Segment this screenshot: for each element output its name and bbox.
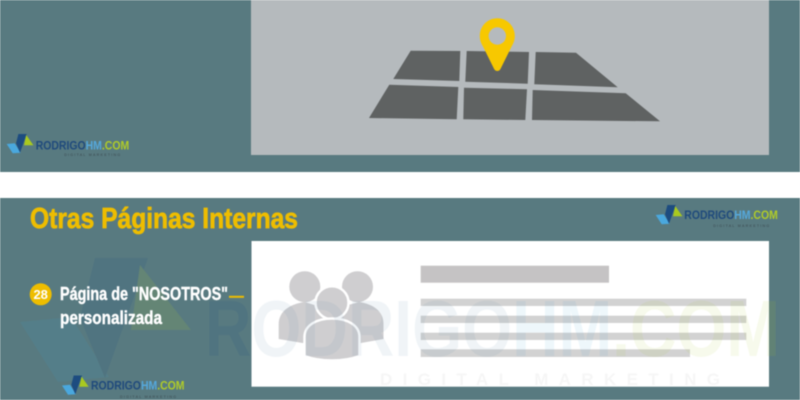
logo: top right: RODRIGOHM.COM [684,208,778,222]
background: top teal band [0,0,800,172]
logo: top right [656,205,778,228]
background: bottom teal band [0,198,800,400]
logo: top right: DIGITAL MARKETING [713,224,769,228]
icon: location pin [480,18,515,71]
logo: bottom left of top section [7,134,129,157]
title: Otras Páginas Internas [30,203,298,235]
map: city blocks [369,51,660,121]
panel: about page placeholder [252,241,769,387]
connector dash [229,296,244,298]
logo: bottom left: DIGITAL MARKETING [120,395,176,399]
watermark logo over white panel [254,300,769,384]
logo: bottom left of top section: RODRIGOHM.COM [36,138,129,152]
logo: bottom left of top section: DIGITAL MARKETING [64,153,120,157]
text: page label: Página de "NOSOTROS" [60,284,228,304]
watermark logo over teal [20,258,780,382]
text placeholder lines [421,299,746,357]
badge: number 28 [30,283,52,305]
panel: map placeholder [251,0,769,155]
text: page label [60,284,228,328]
watermark logo over white panel: DIGITAL MARKETING [380,370,720,389]
icon: group of people [279,271,384,360]
heading placeholder bar [421,266,609,283]
text: page label: personalizada [60,308,163,328]
badge: number 28: 28 [33,287,48,302]
logo: bottom left: RODRIGOHM.COM [91,379,184,393]
logo: bottom left [62,376,184,399]
